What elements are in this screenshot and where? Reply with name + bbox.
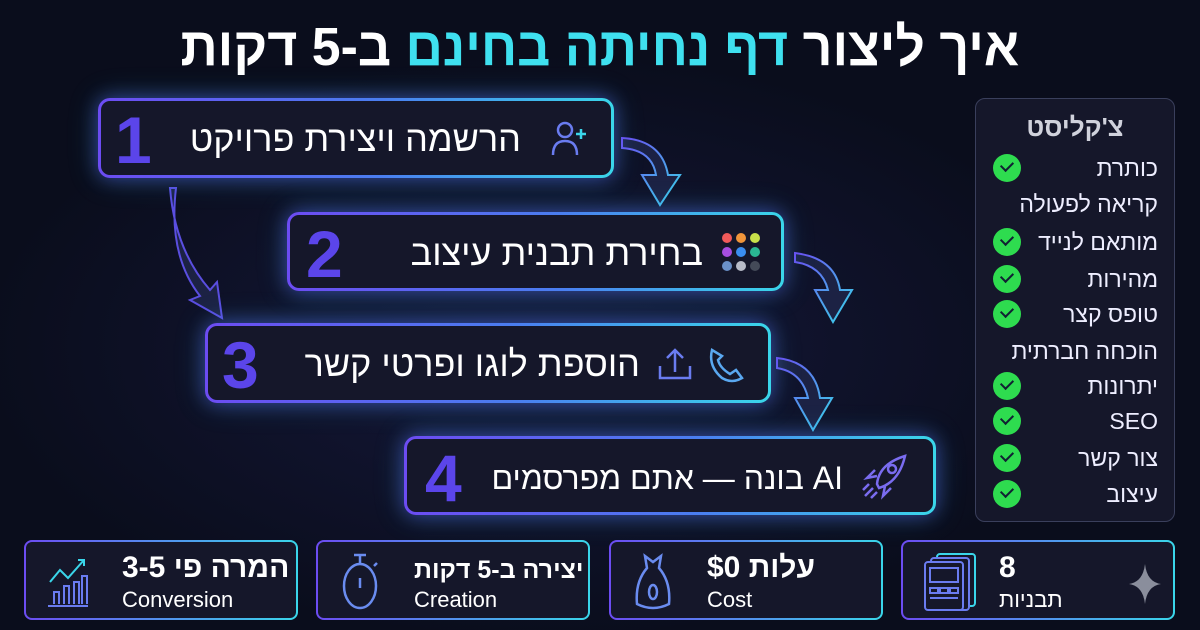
arrow: 1 to 3	[170, 188, 222, 318]
stat: creation: יצירה ב-5 דקות	[414, 556, 583, 584]
arrow: 3 to 4	[777, 358, 832, 430]
icon: add user	[552, 122, 586, 155]
stat: cost: עלות $0	[707, 551, 815, 584]
panel: checklist: צור קשר	[1078, 445, 1158, 471]
number 3: 3	[222, 328, 259, 402]
arrow: 2 to 3 side	[795, 253, 852, 322]
stat: creation: Creation	[414, 587, 497, 612]
arrow: 1 to 2	[622, 138, 680, 205]
number 1: 1	[115, 103, 152, 177]
icon: rocket	[862, 454, 907, 500]
panel: checklist: קריאה לפעולה	[1019, 191, 1158, 217]
step 4	[404, 436, 936, 515]
stat: cost: Cost	[707, 587, 752, 612]
icon: color dots	[722, 233, 760, 271]
stat: templates	[901, 540, 1175, 620]
panel: checklist: SEO	[1109, 408, 1158, 434]
panel: checklist: עיצוב	[1106, 481, 1158, 507]
panel: checklist: מהירות	[1087, 266, 1158, 292]
stat: conversion: המרה פי 3-5	[122, 551, 289, 584]
text 3: הוספת לוגו ופרטי קשר	[305, 343, 640, 384]
panel: checklist: כותרת	[1097, 155, 1158, 181]
panel: checklist: מותאם לנייד	[1038, 229, 1158, 255]
text 2: בחירת תבנית עיצוב	[411, 232, 703, 273]
icon: money bag	[635, 553, 671, 610]
step 2	[287, 212, 784, 291]
step 1	[98, 98, 614, 178]
icon: upload and phone	[658, 348, 744, 382]
icon: templates	[924, 553, 976, 611]
step 3	[205, 323, 771, 403]
stat: templates: תבניות	[999, 587, 1063, 612]
stat: conversion: Conversion	[122, 587, 233, 612]
stat: creation	[316, 540, 590, 620]
number 2: 2	[306, 217, 343, 291]
panel: checklist: הוכחה חברתית	[1011, 338, 1158, 364]
checklist heading: צ'קליסט	[1026, 112, 1124, 142]
text 4: AI בונה — אתם מפרסמים	[491, 460, 843, 496]
panel: checklist: יתרונות	[1088, 373, 1158, 399]
stat: templates: 8	[999, 551, 1016, 584]
panel: checklist: טופס קצר	[1063, 301, 1158, 327]
stat: conversion	[24, 540, 298, 620]
title: איך ליצור דף נחיתה בחינם ב-5 דקות	[181, 17, 1019, 77]
icon: chart	[48, 559, 88, 607]
text 1: הרשמה ויצירת פרויקט	[190, 118, 521, 159]
panel: checklist	[975, 98, 1175, 522]
icon: stopwatch	[342, 554, 378, 610]
icon: sparkle	[1129, 564, 1161, 604]
stat: cost	[609, 540, 883, 620]
number 4: 4	[425, 441, 462, 515]
